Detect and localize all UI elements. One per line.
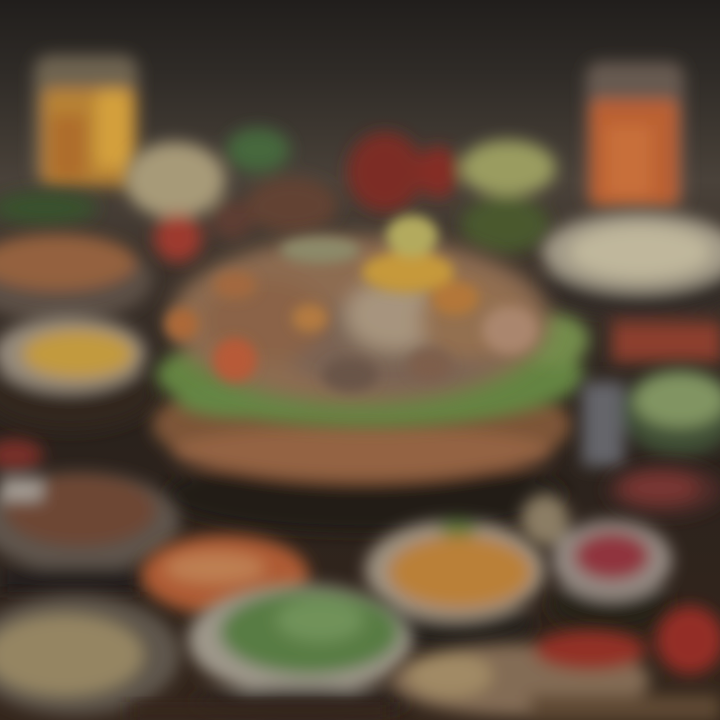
table: bottom wood strip (130, 702, 390, 720)
plate: bottom center green salad (188, 584, 412, 716)
plate: lower center orange bowl (365, 519, 545, 649)
background food: vegetables and tomatoes (0, 128, 556, 262)
plate: lower middle orange dish (141, 535, 309, 615)
plate: lower left brown dish (0, 439, 180, 592)
plate: bottom left grain dish (0, 595, 180, 715)
plate: lower right red bowl (521, 494, 672, 633)
glass: right orange drink (586, 62, 684, 208)
plate: right red berries (607, 464, 720, 516)
meat pile (170, 236, 550, 404)
bowl base (152, 367, 572, 533)
plate: left yellow dish (0, 316, 155, 431)
toppings (165, 215, 538, 392)
plate: upper left dish (0, 234, 152, 322)
plate: upper right white dish (540, 212, 720, 362)
lettuce bed (156, 314, 589, 427)
glass: left orange drink (34, 55, 138, 186)
plate: right green dish (582, 368, 720, 466)
central dish (152, 215, 589, 533)
plate: bottom right tomatoes (390, 606, 720, 720)
